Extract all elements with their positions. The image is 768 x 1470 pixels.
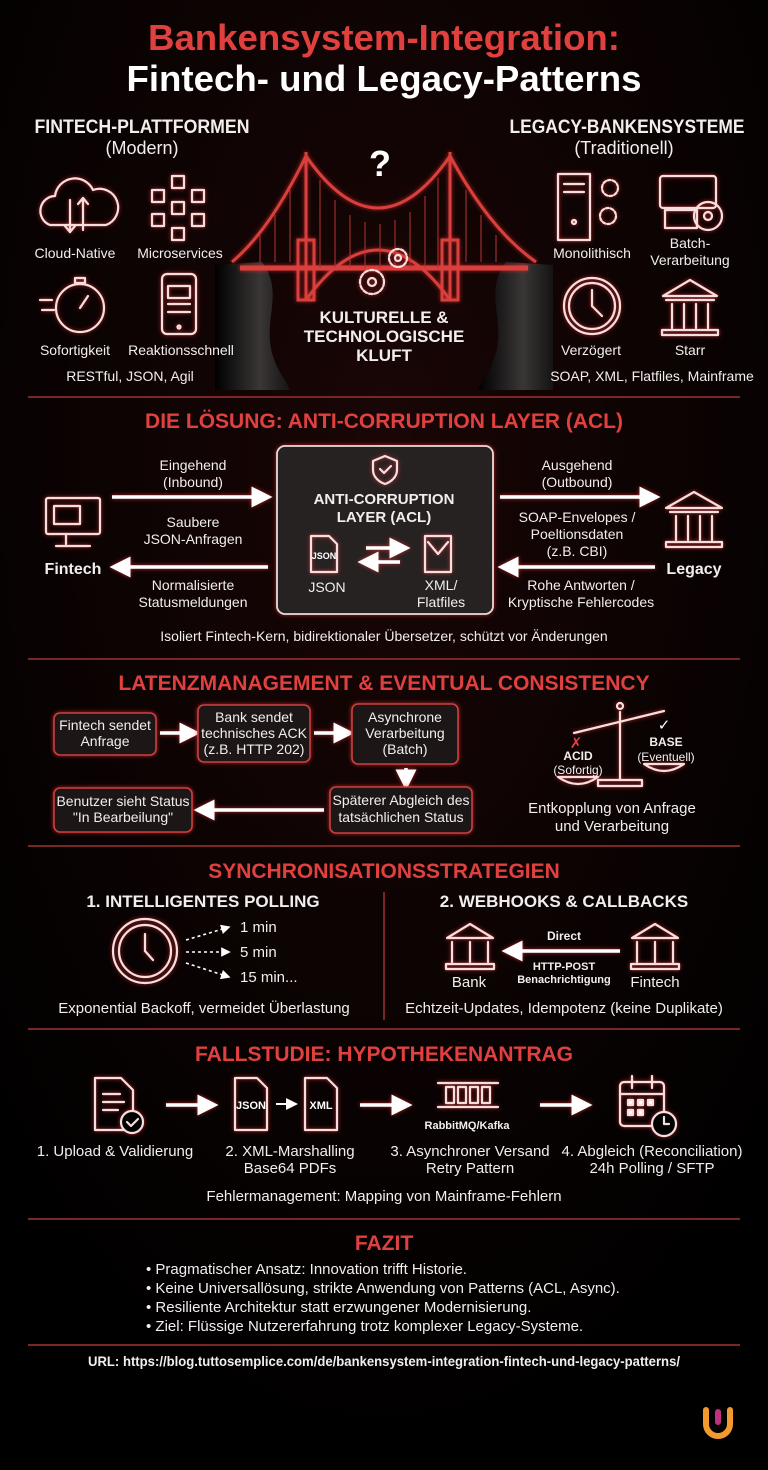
icon: json to xml: JSON: [236, 1100, 266, 1112]
icon: balance scale: [553, 703, 695, 786]
arrow: outbound to legacy: Ausgehend: [542, 457, 612, 473]
heading: ACL: DIE LÖSUNG: ANTI-CORRUPTION LAYER (ACL): [145, 410, 623, 433]
panel: ACL: [45, 410, 722, 644]
box: ACL core: LAYER (ACL): [337, 509, 431, 526]
subpanel: webhooks: Echtzeit-Updates, Idempotenz (keine Duplikate): [405, 1000, 723, 1017]
arrow: outbound to legacy: [500, 457, 650, 559]
flow box 3: Asynchrone: [368, 709, 442, 725]
flow box 1: Fintech sendet: [59, 717, 151, 733]
step labels: 4. Abgleich (Reconciliation): [562, 1143, 742, 1160]
icon: balance scale: (Sofortig): [553, 763, 603, 777]
icon: question mark: ?: [369, 143, 391, 184]
arrow: outbound to legacy: (z.B. CBI): [547, 543, 607, 559]
panel: bridge gap: [215, 143, 553, 390]
text: scale caption: und Verarbeitung: [555, 818, 669, 835]
icon: clock: [564, 278, 620, 334]
bullet list: • Pragmatischer Ansatz: Innovation trifft Historie.: [146, 1261, 467, 1278]
flow box 5: "In Bearbeilung": [73, 809, 173, 825]
flow box 4: [330, 787, 472, 833]
flow box 4: Späterer Abgleich des: [333, 792, 469, 808]
panel: legacy systems: Verzögert: [561, 342, 621, 358]
bullet list: • Ziel: Flüssige Nutzererfahrung trotz komplexer Legacy-Systeme.: [146, 1318, 583, 1335]
panel: ACL: Fintech: [45, 561, 101, 578]
heading: sync: SYNCHRONISATIONSSTRATEGIEN: [208, 860, 560, 883]
panel: legacy systems: Batch-: [670, 235, 711, 251]
text: scale caption: [528, 800, 696, 835]
icon: balance scale: ACID: [563, 749, 593, 763]
icon: gears: [360, 249, 407, 294]
subpanel: polling: 5 min: [240, 944, 277, 961]
arrow: outbound to fintech: Normalisierte: [152, 577, 234, 593]
panel: conclusion: [146, 1232, 620, 1335]
arrow: [160, 731, 190, 735]
text: gap label: TECHNOLOGISCHE: [304, 327, 464, 346]
heading: fintech: FINTECH-PLATTFORMEN: [34, 117, 250, 138]
footer URL: URL: https://blog.tuttosemplice.com/de/bankensystem-integration-fintech-und-legacy-patterns/: [88, 1353, 680, 1369]
subpanel: polling: [58, 892, 350, 1017]
arrow: raw responses: Kryptische Fehlercodes: [508, 594, 654, 610]
subpanel: webhooks: 2. WEBHOOKS & CALLBACKS: [440, 892, 688, 911]
panel: fintech platforms: Microservices: [137, 245, 223, 261]
flow box 2: (z.B. HTTP 202): [204, 741, 304, 757]
icon: legacy bank: [666, 492, 722, 547]
arrow: inbound: (Inbound): [163, 474, 223, 490]
subpanel: polling: 1. INTELLIGENTES POLLING: [86, 892, 320, 911]
arrow: raw responses: Rohe Antworten /: [527, 577, 635, 593]
step labels: [37, 1143, 742, 1177]
title: Bankensystem-Integration:: [148, 17, 620, 58]
arrow: outbound to fintech: Statusmeldungen: [139, 594, 247, 610]
subpanel: webhooks: Direct: [547, 929, 581, 943]
heading: legacy: LEGACY-BANKENSYSTEME: [510, 117, 744, 138]
subpanel: webhooks: Benachrichtigung: [517, 974, 611, 986]
text: gap label: KLUFT: [356, 346, 412, 365]
panel: case study: [37, 1043, 742, 1205]
icon: bank building: [662, 280, 718, 335]
heading: Fazit: FAZIT: [355, 1232, 413, 1255]
panel: fintech platforms: Cloud-Native: [35, 245, 116, 261]
panel: legacy systems: [510, 117, 754, 384]
icon: document check: [95, 1078, 143, 1133]
arrow: [314, 731, 344, 735]
bullet list: • Keine Universallösung, strikte Anwendung von Patterns (ACL, Async).: [146, 1280, 620, 1297]
icon: stopwatch: [40, 278, 104, 332]
box: ACL core: [277, 446, 493, 614]
flow box 4: tatsächlichen Status: [338, 809, 464, 825]
arrow: [404, 768, 408, 780]
flow box 3: [352, 704, 458, 764]
arrow: [204, 808, 324, 812]
panel: legacy systems: Starr: [675, 342, 706, 358]
icon: cloud: [40, 178, 118, 232]
panel: fintech platforms: [34, 117, 250, 384]
heading: fintech: (Modern): [105, 138, 179, 158]
icon: balance scale: ✗: [570, 735, 582, 752]
icon: json to xml: XML: [309, 1100, 333, 1112]
bullet list: • Resiliente Architektur statt erzwungener Modernisierung.: [146, 1299, 531, 1316]
flow box 2: technisches ACK: [201, 725, 308, 741]
bullet list: [146, 1261, 620, 1335]
step labels: Retry Pattern: [426, 1160, 514, 1177]
step labels: 1. Upload & Validierung: [37, 1143, 193, 1160]
icon: microservices: [152, 176, 204, 240]
panel: legacy systems: Verarbeitung: [650, 252, 730, 268]
title: Fintech- und Legacy-Patterns: [126, 58, 642, 99]
heading: legacy: [510, 117, 744, 158]
text: gap label: [304, 308, 464, 365]
box: ACL core: JSON: [312, 551, 336, 561]
flow box 3: Verarbeitung: [365, 725, 445, 741]
arrow: outbound to legacy: Poeltionsdaten: [531, 526, 623, 542]
icon: message queue: [425, 1083, 510, 1132]
arrow: inbound: Eingehend: [160, 457, 226, 473]
arrow: inbound: [112, 457, 262, 547]
step labels: 2. XML-Marshalling: [225, 1143, 355, 1160]
icon: batch tape: [660, 176, 722, 230]
flow box 2: [198, 705, 310, 762]
arrow: inbound: Saubere: [167, 514, 220, 530]
box: ACL core: JSON: [308, 579, 346, 595]
panel: fintech platforms: Sofortigkeit: [40, 342, 110, 358]
icon: message queue: RabbitMQ/Kafka: [425, 1120, 510, 1132]
icon: calendar clock: [620, 1076, 676, 1136]
box: ACL core: Flatfiles: [417, 594, 465, 610]
arrow: outbound to fintech: [120, 567, 268, 610]
flow box 1: Anfrage: [80, 733, 130, 749]
heading: legacy: (Traditionell): [574, 138, 674, 158]
arrow: outbound to legacy: SOAP-Envelopes /: [519, 509, 635, 525]
subpanel: webhooks: Fintech: [630, 974, 680, 991]
icon: json to xml: [235, 1078, 337, 1130]
flow box 5: Benutzer sieht Status: [56, 793, 190, 809]
text: ACL caption: Isoliert Fintech-Kern, bidirektionaler Übersetzer, schützt vor Änderungen: [160, 627, 608, 644]
subpanel: webhooks: HTTP-POST: [533, 961, 595, 973]
panel: legacy systems: Monolithisch: [553, 245, 631, 261]
arrow: raw responses: [508, 567, 655, 610]
subpanel: polling: 1 min: [240, 919, 277, 936]
heading: latency: LATENZMANAGEMENT & EVENTUAL CONSISTENCY: [118, 672, 650, 695]
box: ACL core: ANTI-CORRUPTION: [314, 491, 454, 508]
panel: sync strategies: [58, 860, 723, 1020]
flow box 2: Bank sendet: [215, 709, 293, 725]
box: ACL core: XML/: [425, 577, 457, 593]
illustration: cliffs and bridge: [215, 152, 553, 390]
icon: fintech monitor: [46, 498, 100, 546]
subpanel: webhooks: [405, 892, 723, 1017]
subpanel: polling: 15 min...: [240, 969, 298, 986]
icon: server gears: [558, 174, 618, 240]
step labels: Base64 PDFs: [244, 1160, 336, 1177]
icon: balance scale: (Eventuell): [637, 750, 695, 764]
icon: balance scale: BASE: [649, 735, 683, 749]
text: gap label: KULTURELLE &: [319, 308, 449, 327]
logo: [706, 1410, 730, 1436]
text: error management: Fehlermanagement: Mapping von Mainframe-Fehlern: [206, 1188, 562, 1205]
text: fintech tech: RESTful, JSON, Agil: [66, 368, 194, 384]
panel: fintech platforms: Reaktionsschnell: [128, 342, 234, 358]
step labels: 24h Polling / SFTP: [589, 1160, 715, 1177]
arrow: inbound: JSON-Anfragen: [144, 531, 242, 547]
text: scale caption: Entkopplung von Anfrage: [528, 800, 696, 817]
arrow: outbound to legacy: (Outbound): [542, 474, 612, 490]
icon: smartphone: [162, 274, 196, 334]
title: [126, 17, 642, 99]
step labels: 3. Asynchroner Versand: [390, 1143, 550, 1160]
icon: balance scale: ✓: [658, 717, 670, 734]
heading: fintech: [34, 117, 250, 158]
heading: case study: FALLSTUDIE: HYPOTHEKENANTRAG: [195, 1043, 573, 1066]
flow box 5: [54, 788, 192, 832]
flow box 1: [54, 713, 156, 755]
text: legacy tech: SOAP, XML, Flatfiles, Mainframe: [550, 368, 754, 384]
panel: ACL: Legacy: [666, 561, 722, 578]
subpanel: polling: Exponential Backoff, vermeidet Überlastung: [58, 999, 350, 1017]
panel: latency: [54, 672, 696, 835]
flow box 3: (Batch): [382, 741, 428, 757]
subpanel: webhooks: Bank: [452, 974, 487, 991]
